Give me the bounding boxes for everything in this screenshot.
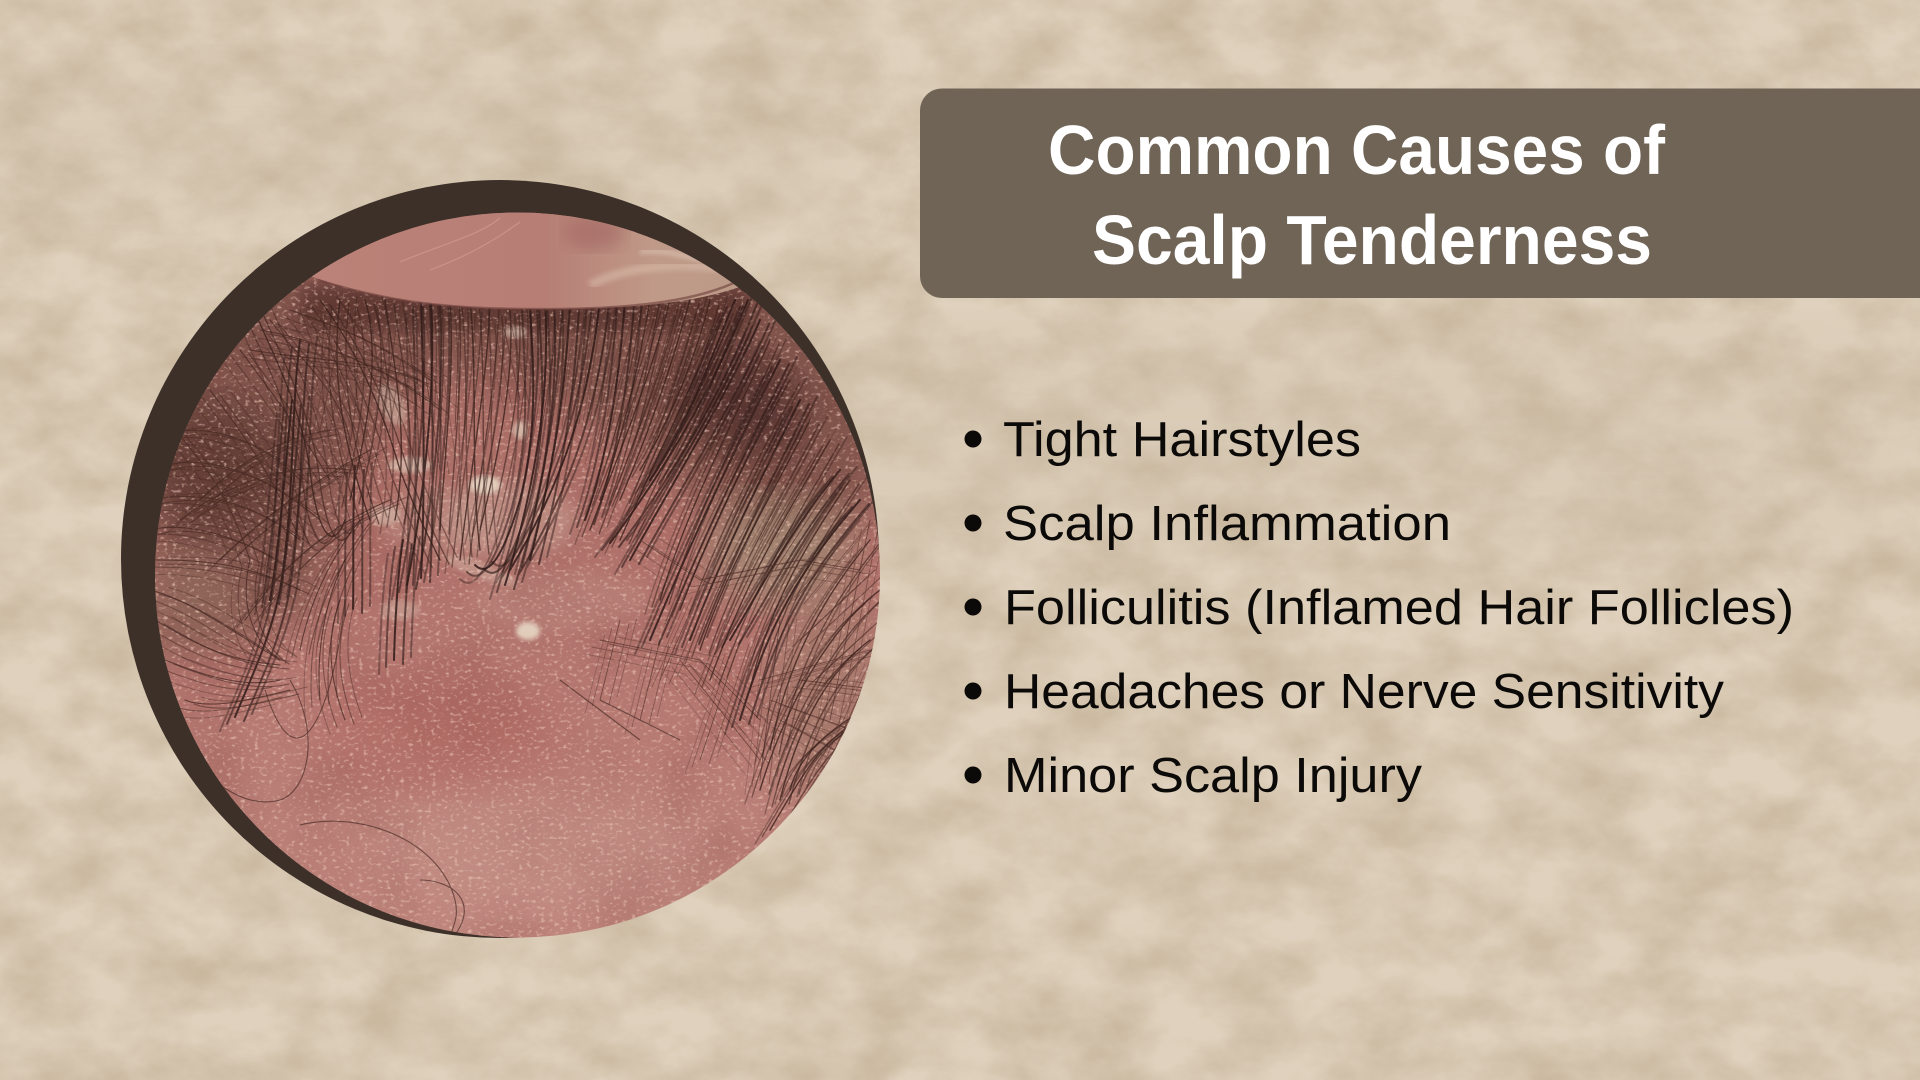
title banner	[920, 88, 1920, 298]
item: folliculitis: Folliculitis (Inflamed Hair Follicles)	[1004, 581, 1794, 635]
hair shadow zones	[145, 270, 885, 800]
forehead skin fold	[300, 210, 745, 309]
scalp photo circle	[135, 210, 902, 940]
item: headaches: Headaches or Nerve Sensitivity	[1004, 665, 1725, 719]
list of causes	[964, 413, 1794, 803]
hair strands	[135, 297, 902, 940]
title text	[1048, 111, 1666, 279]
skin base	[150, 210, 885, 940]
dark circle behind photo	[121, 180, 879, 938]
fine skin flakes	[150, 210, 885, 940]
title text: Scalp Tenderness	[1092, 201, 1652, 279]
white scale patches	[369, 326, 710, 910]
item: scalp inflammation: Scalp Inflammation	[1003, 497, 1451, 551]
skin mottling	[202, 549, 750, 938]
item: tight hairstyles: Tight Hairstyles	[1003, 413, 1361, 467]
item: minor injury: Minor Scalp Injury	[1004, 749, 1423, 803]
title text: Common Causes of	[1048, 111, 1666, 189]
